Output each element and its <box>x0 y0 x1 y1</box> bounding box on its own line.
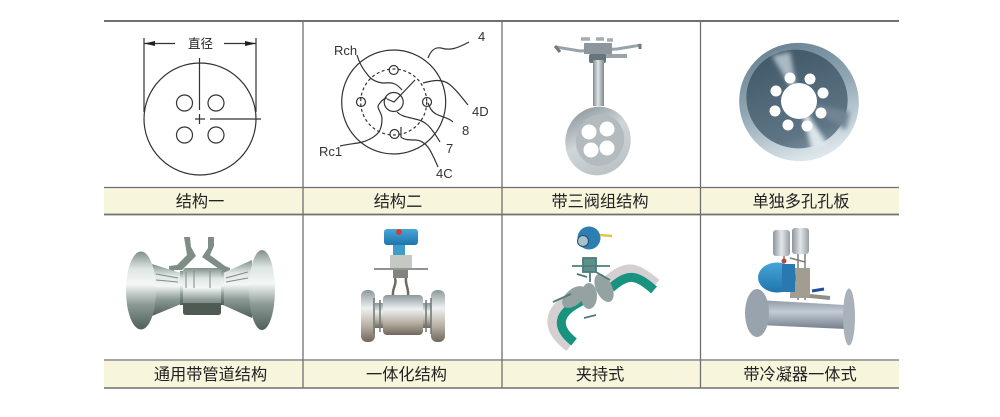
left flange <box>126 252 156 330</box>
callout labels: 4C <box>436 166 453 181</box>
callout labels: 4 <box>478 29 485 44</box>
panel: orifice plate with three-valve manifold <box>555 39 641 184</box>
caption: structure 2: 结构二 <box>374 193 422 211</box>
panel: wafer type <box>553 226 656 345</box>
pipe body <box>152 260 252 318</box>
callout labels: 7 <box>446 141 453 156</box>
callout labels: 8 <box>462 123 469 138</box>
caption: multi-hole plate: 单独多孔孔板 <box>752 193 850 211</box>
transmitter <box>578 226 612 250</box>
flanged body <box>361 290 445 342</box>
dimension label: 直径 <box>188 37 213 51</box>
manifold <box>553 258 610 318</box>
callout labels: Rch <box>334 43 357 58</box>
caption: structure 1: 结构一 <box>176 193 224 211</box>
caption: integrated: 一体化结构 <box>366 366 447 384</box>
caption: wafer: 夹持式 <box>576 366 624 384</box>
panel: integrated with condensers <box>745 228 855 346</box>
right flange <box>249 250 275 330</box>
callout labels <box>319 29 489 181</box>
transmitter <box>758 258 830 298</box>
flanged disc <box>556 98 640 184</box>
callout labels: 4D <box>472 104 489 119</box>
condensers <box>773 228 809 300</box>
table grid <box>104 21 899 388</box>
panel: integrated structure <box>361 229 445 342</box>
panel: structure 2 diagram <box>319 29 489 181</box>
caption band backgrounds <box>104 188 899 388</box>
impulse taps <box>169 237 230 288</box>
caption: general with pipe: 通用带管道结构 <box>154 366 267 384</box>
panel: structure 1 diagram <box>144 37 261 175</box>
panel: general with pipe section <box>126 237 275 330</box>
caption: three-valve: 带三阀组结构 <box>551 193 649 211</box>
caption: condenser integrated: 带冷凝器一体式 <box>743 366 857 384</box>
pipe <box>555 270 656 345</box>
highlights <box>772 52 850 151</box>
panel: standalone multi-hole plate <box>720 23 878 181</box>
callout labels: Rc1 <box>319 144 342 159</box>
flanged pipe <box>745 288 855 346</box>
manifold <box>555 39 641 63</box>
transmitter <box>384 229 418 256</box>
flanges <box>558 271 618 312</box>
stem <box>593 60 604 106</box>
manifold <box>374 255 428 296</box>
